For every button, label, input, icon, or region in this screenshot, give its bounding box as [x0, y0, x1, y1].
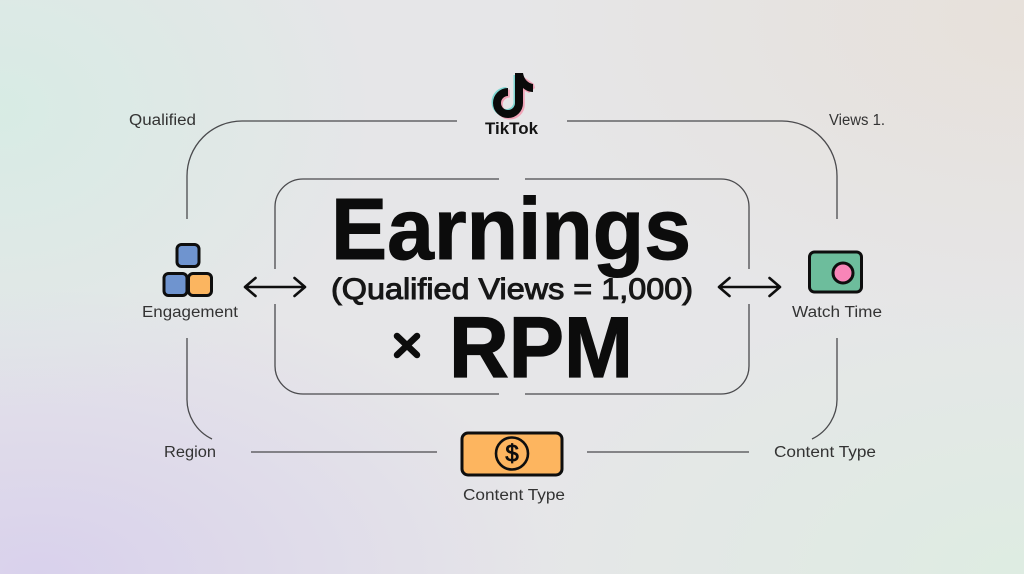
icon: TikTok logo	[496, 73, 535, 116]
icon: dollar banknote: $	[505, 440, 519, 468]
label: Watch Time: Watch Time	[792, 304, 882, 321]
heading: Earnings: Earnings	[331, 181, 691, 278]
heading: RPM: RPM	[449, 300, 633, 396]
icon: watch time screen	[810, 252, 862, 292]
label: Region: Region	[164, 444, 216, 461]
multiplication sign	[397, 336, 417, 355]
icon: engagement blocks	[164, 244, 212, 296]
formula text: qualified views: (Qualified Views = 1,000)	[331, 273, 693, 306]
inner formula frame	[275, 179, 749, 394]
label: Content Type bottom: Content Type	[463, 487, 565, 504]
label: Content Type right: Content Type	[774, 444, 876, 461]
arrow: left double-headed	[245, 278, 305, 296]
outer connector frame	[187, 121, 837, 452]
label: Engagement: Engagement	[142, 304, 239, 321]
label: Qualified: Qualified	[129, 112, 196, 129]
label: Views 1.: Views 1.	[829, 112, 885, 129]
icon: dollar banknote	[462, 433, 562, 475]
arrow: right double-headed	[719, 278, 780, 296]
label: TikTok: TikTok	[485, 120, 539, 138]
